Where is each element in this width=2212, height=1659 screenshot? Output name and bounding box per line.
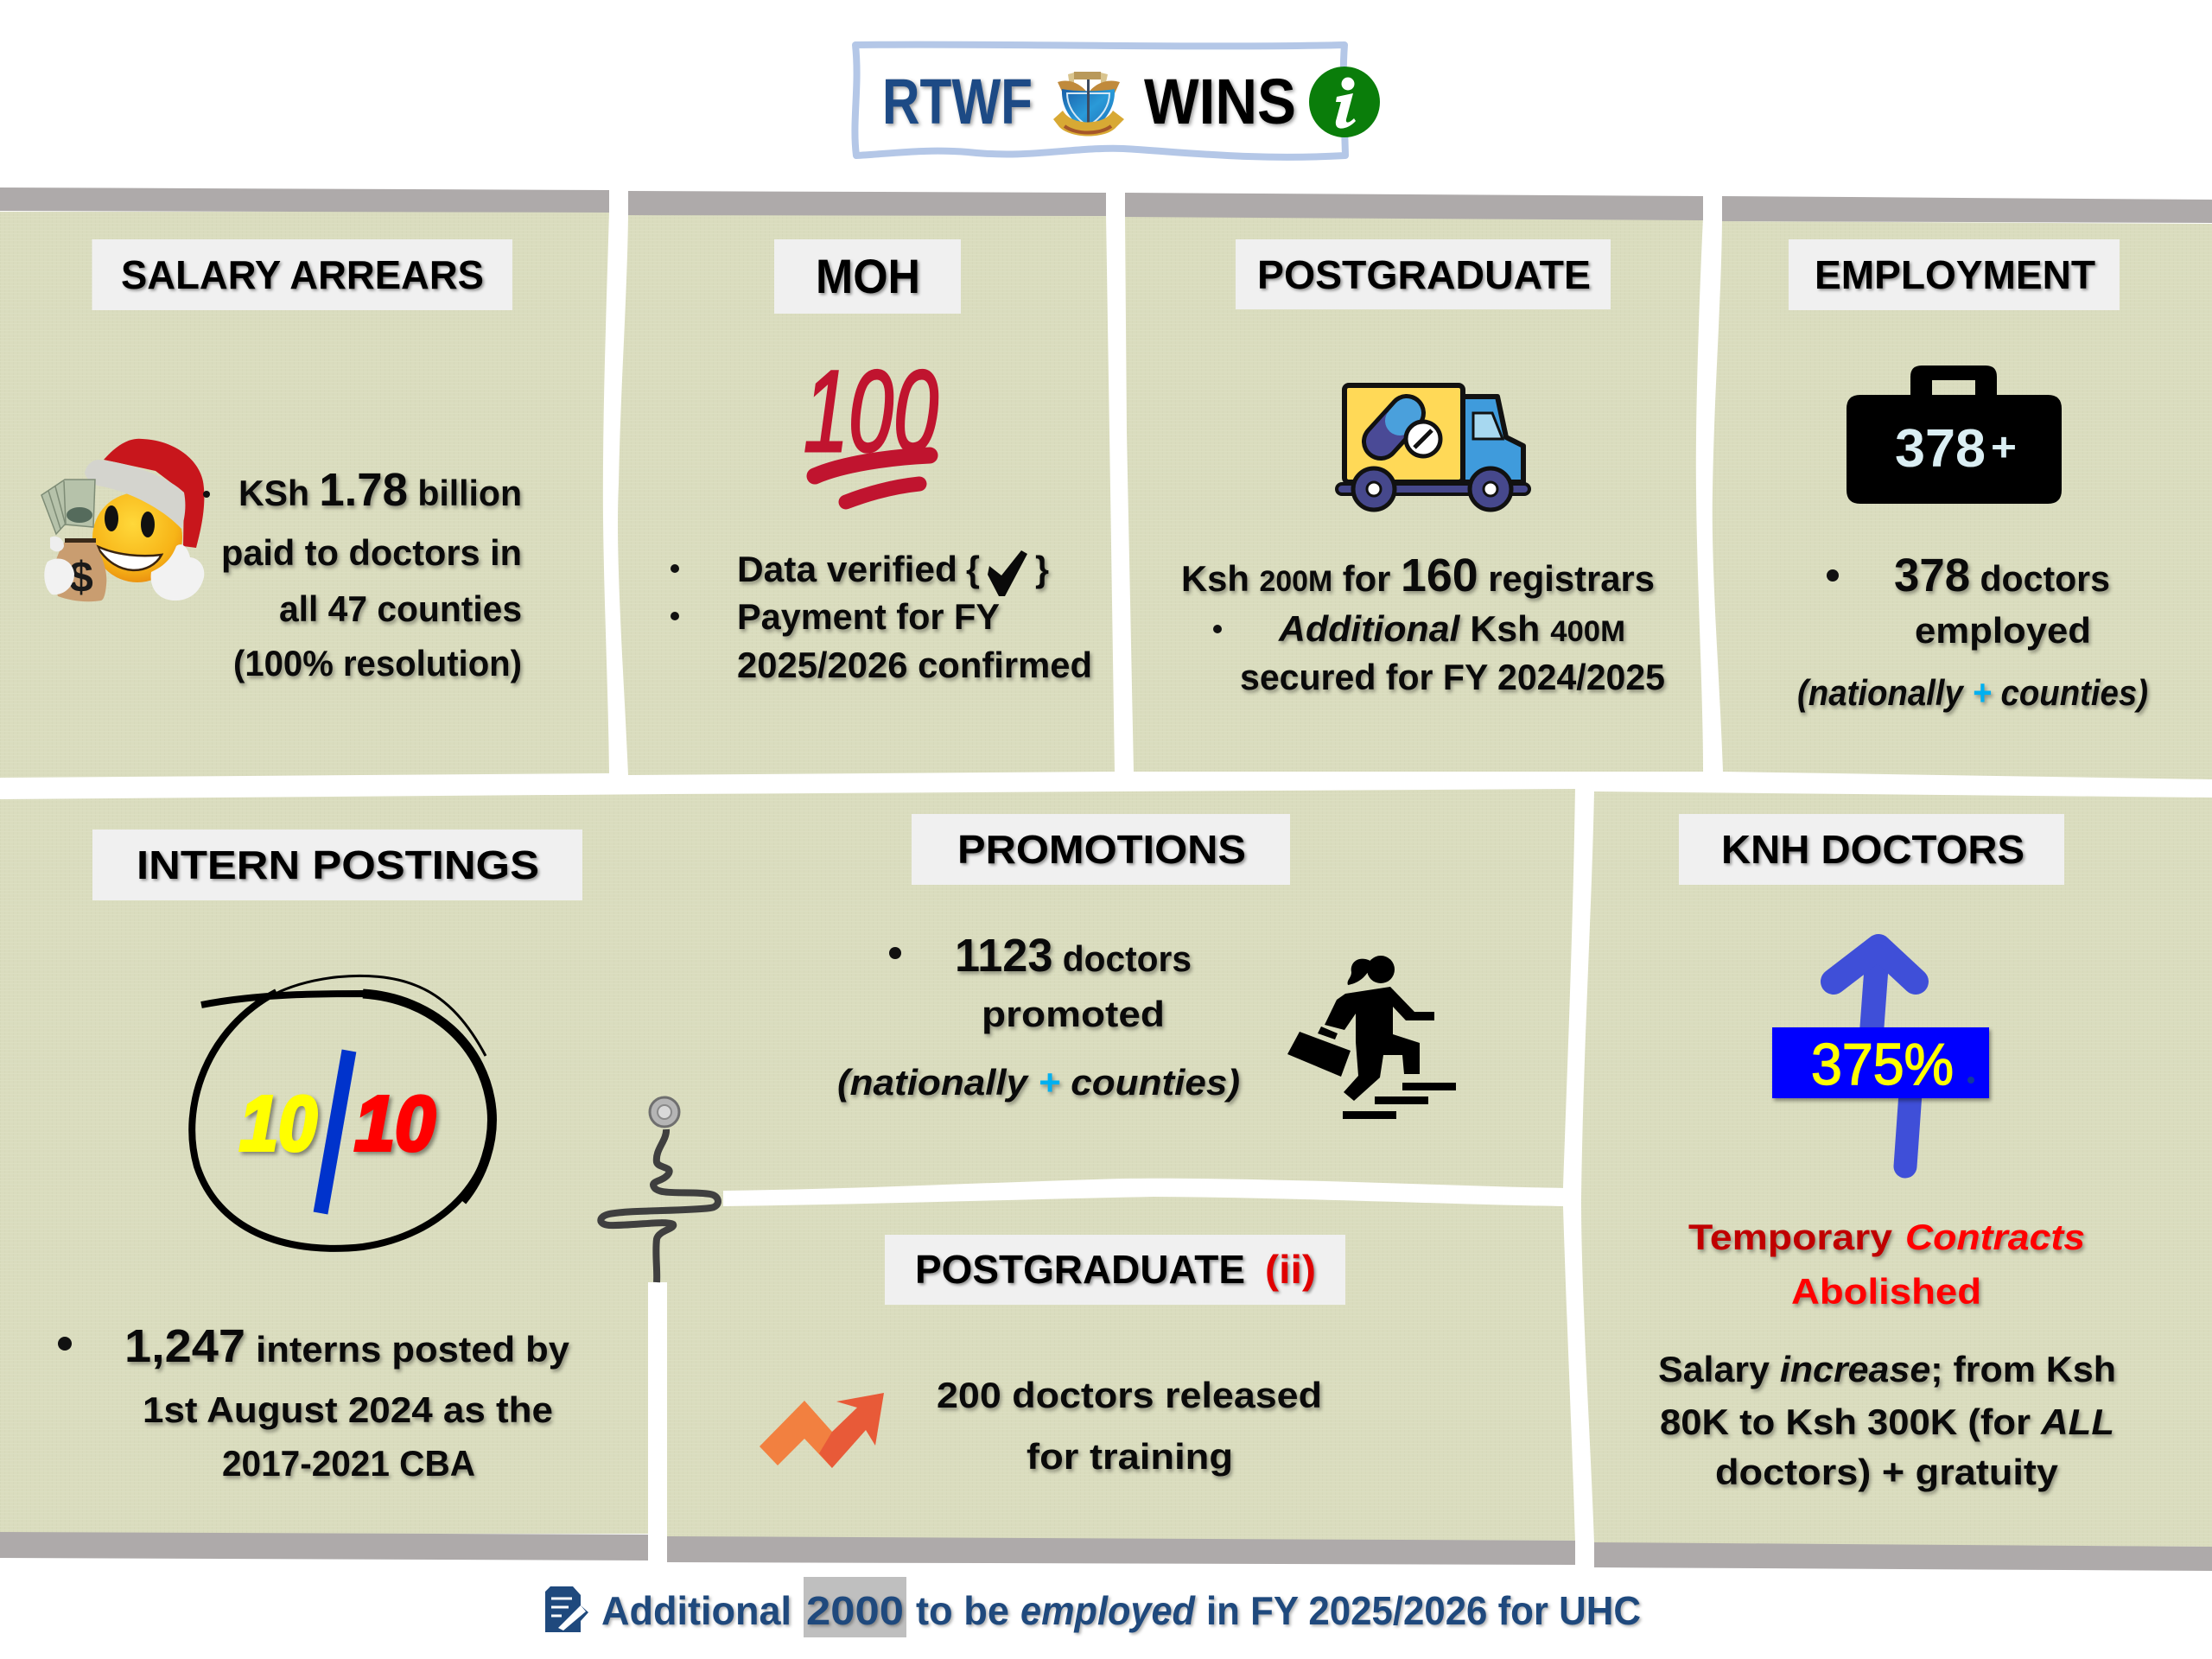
icon: briefcase 378+: + (1991, 424, 2017, 469)
heading: promotions: PROMOTIONS (957, 827, 1246, 872)
text: employment count: 378 doctors (1894, 550, 2110, 601)
text: employment count (1797, 550, 2148, 713)
text: MOH list (671, 549, 1092, 685)
icon: woman climbing stairs (1287, 956, 1456, 1119)
text: salary arrears paid: paid to doctors in (221, 532, 522, 573)
icon: stethoscope (601, 1097, 718, 1282)
icon: 10/10 circled score: 10 (354, 1081, 435, 1167)
title frame (855, 45, 1345, 157)
text: MOH list: 2025/2026 confirmed (737, 645, 1092, 685)
heading: MOH (774, 239, 961, 314)
heading: salary arrears: SALARY ARREARS (121, 252, 484, 297)
text: contracts abolished: Temporary (1688, 1217, 1893, 1257)
text: salary increase: Salary increase; from Ksh (1658, 1349, 2116, 1389)
heading: intern postings: INTERN POSTINGS (137, 842, 539, 887)
footer note (545, 1577, 1641, 1637)
heading: postgraduate ii: (ii) (1265, 1247, 1316, 1292)
panel: employment (1713, 196, 2212, 779)
title banner (855, 45, 1380, 157)
icon: document with pen (545, 1586, 588, 1632)
heading: salary arrears (92, 239, 512, 310)
heading: postgraduate ii: POSTGRADUATE (915, 1247, 1245, 1292)
text: contracts abolished: Contracts (1905, 1217, 2085, 1257)
panel: MOH (618, 191, 1115, 775)
text: promotions count: 1123 doctors (955, 930, 1192, 982)
icon: 10/10 circled score (192, 976, 492, 1249)
text: promotions count (837, 930, 1240, 1103)
text: salary arrears paid: (100% resolution) (233, 643, 522, 683)
text: salary increase (1658, 1349, 2116, 1492)
panel: postgraduate (1125, 193, 1703, 772)
text: intern postings: 1,247 interns posted by (124, 1320, 570, 1372)
icon: 100 emoji (804, 347, 938, 502)
text: salary arrears paid: KSh 1.78 billion (238, 464, 522, 516)
icon: 100 emoji: 100 (804, 347, 938, 476)
text: salary arrears paid: all 47 counties (279, 588, 522, 629)
footer text: to be (916, 1588, 1009, 1633)
bullet marker (203, 491, 210, 498)
footer text: 2000 (806, 1588, 904, 1633)
icon: medicine truck (1337, 385, 1529, 510)
heading: postgraduate ii (885, 1235, 1345, 1305)
callout: 375%: 375% (1811, 1032, 1954, 1097)
footer text: Additional (601, 1588, 791, 1633)
icon: 10/10 circled score: 10 (239, 1081, 317, 1167)
text: postgraduate funding: Additional Ksh 400M (1278, 608, 1625, 649)
panel: salary arrears (0, 188, 609, 778)
footer text: in FY 2025/2026 for UHC (1206, 1588, 1641, 1633)
heading: postgraduate: POSTGRADUATE (1257, 252, 1591, 297)
icon: briefcase 378+ (1847, 365, 2062, 504)
panel: promotions (665, 789, 1575, 1207)
text: postgraduate funding: secured for FY 2024/2025 (1240, 657, 1665, 697)
text: promotions count: promoted (982, 994, 1165, 1034)
icon: briefcase 378+: 378 (1895, 419, 1986, 479)
icon: blue up arrow (1834, 947, 1916, 1166)
icon: rising orange arrow (760, 1393, 884, 1468)
heading: KNH doctors (1679, 814, 2064, 885)
icon: santa smiley with money: $ (69, 553, 93, 601)
text: MOH list: { (966, 549, 980, 589)
text: contracts abolished (1688, 1217, 2085, 1312)
text: contracts abolished: Abolished (1791, 1271, 1981, 1312)
text: MOH list: Payment for FY (737, 596, 1000, 637)
heading: postgraduate (1236, 239, 1611, 309)
heading: employment (1789, 239, 2120, 310)
callout: 375% (1772, 1027, 1989, 1098)
text: intern postings (58, 1320, 570, 1484)
footer text (601, 1588, 1641, 1633)
text: salary increase: doctors) + gratuity (1715, 1452, 2059, 1492)
panel: KNH doctors (1581, 791, 2212, 1571)
panel: postgraduate (ii) (667, 1197, 1575, 1565)
panel: intern postings (0, 794, 667, 1560)
text: salary increase: 80K to Ksh 300K (for ALL (1660, 1402, 2114, 1442)
icon: santa smiley with money (41, 439, 204, 601)
text: doctors released: 200 doctors released (937, 1375, 1322, 1415)
heading: employment: EMPLOYMENT (1815, 252, 2095, 297)
text: promotions count: (nationally + counties) (837, 1062, 1240, 1103)
footer text: employed (1020, 1588, 1196, 1633)
text: employment count: (nationally + counties) (1797, 672, 2148, 713)
heading: KNH doctors: KNH DOCTORS (1721, 827, 2024, 872)
heading: MOH: MOH (816, 249, 920, 303)
text: postgraduate funding: Ksh 200M for 160 registrars (1181, 550, 1655, 601)
text: intern postings: 1st August 2024 as the (143, 1389, 553, 1430)
text: salary arrears paid (221, 464, 522, 683)
icon: info (1309, 67, 1380, 137)
icon: crest (1053, 72, 1124, 137)
title word RTWF: RTWF (882, 66, 1033, 137)
text: doctors released (937, 1375, 1322, 1477)
text: doctors released: for training (1027, 1436, 1233, 1477)
text: postgraduate funding (1181, 550, 1665, 697)
text: employment count: employed (1915, 610, 2091, 651)
text: intern postings: 2017-2021 CBA (222, 1443, 475, 1484)
title word WINS: WINS (1144, 66, 1296, 137)
text: MOH list: Data verified (737, 549, 957, 589)
heading: promotions (912, 814, 1290, 885)
heading: intern postings (92, 830, 582, 900)
highlight: 2000 (804, 1577, 906, 1637)
text: MOH list: } (1035, 549, 1049, 589)
